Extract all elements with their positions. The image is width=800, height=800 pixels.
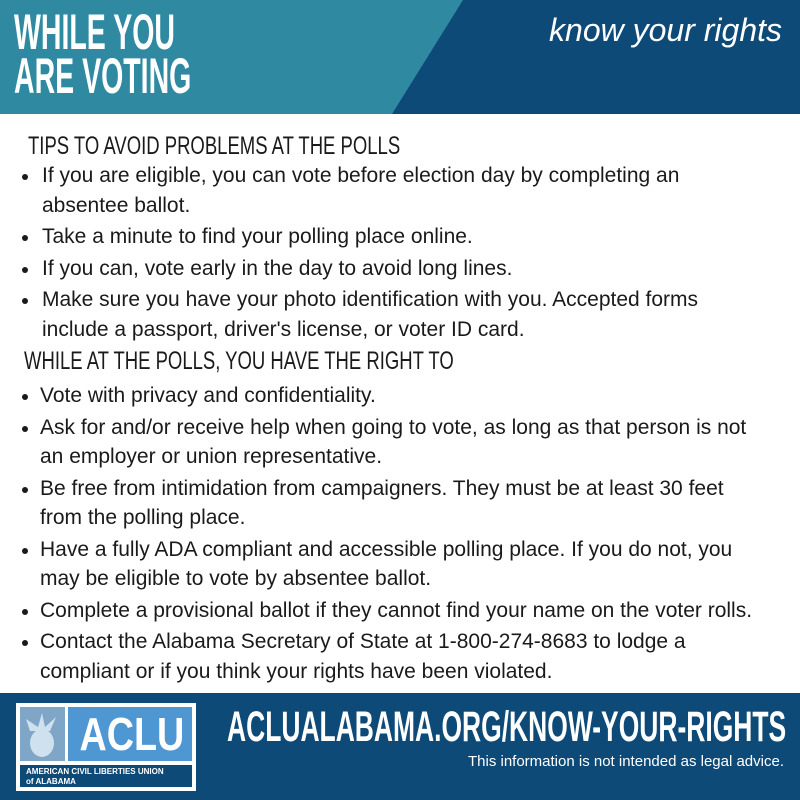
heading: rights: WHILE AT THE POLLS, YOU HAVE THE RIGHT TO (24, 347, 454, 375)
list: rights: Have a fully ADA compliant and accessible polling place. If you do not, you may be eligible to vote by absentee ballot. (40, 538, 732, 590)
list: rights: Contact the Alabama Secretary of State at 1-800-274-8683 to lodge a compliant or if you think your rights have been violated. (40, 630, 686, 682)
title: WHILE YOU (14, 4, 175, 60)
title (14, 4, 191, 104)
heading: tips: TIPS TO AVOID PROBLEMS AT THE POLLS (28, 132, 400, 160)
list: tips: If you can, vote early in the day to avoid long lines. (42, 256, 512, 280)
list: rights: Ask for and/or receive help when going to vote, as long as that person is not an employer or union representative. (40, 416, 746, 468)
list: rights: Be free from intimidation from campaigners. They must be at least 30 feet from the polling place. (40, 476, 724, 529)
list: tips: Make sure you have your photo identification with you. Accepted forms include a passport, driver's license, or voter ID card. (42, 288, 698, 340)
icon: statue of liberty (20, 707, 65, 761)
tagline: know your rights (549, 12, 782, 48)
logo: ACLU: of ALABAMA (26, 777, 76, 786)
list: rights (22, 384, 752, 682)
list: rights: Vote with privacy and confidentiality. (40, 384, 376, 407)
list: rights: Complete a provisional ballot if they cannot find your name on the voter rolls. (40, 598, 752, 622)
logo: ACLU: ACLU (79, 708, 184, 760)
footer (0, 693, 800, 800)
list: tips: Take a minute to find your polling place online. (42, 225, 473, 248)
list: tips: If you are eligible, you can vote before election day by completing an absentee ballot. (42, 164, 679, 216)
disclaimer: This information is not intended as legal advice. (468, 753, 784, 770)
list: tips (22, 164, 698, 340)
logo: ACLU (16, 703, 196, 791)
header banner (0, 0, 800, 114)
url: ACLUALABAMA.ORG/KNOW-YOUR-RIGHTS (227, 703, 786, 751)
logo: ACLU: AMERICAN CIVIL LIBERTIES UNION (26, 767, 164, 776)
title: ARE VOTING (14, 48, 191, 104)
